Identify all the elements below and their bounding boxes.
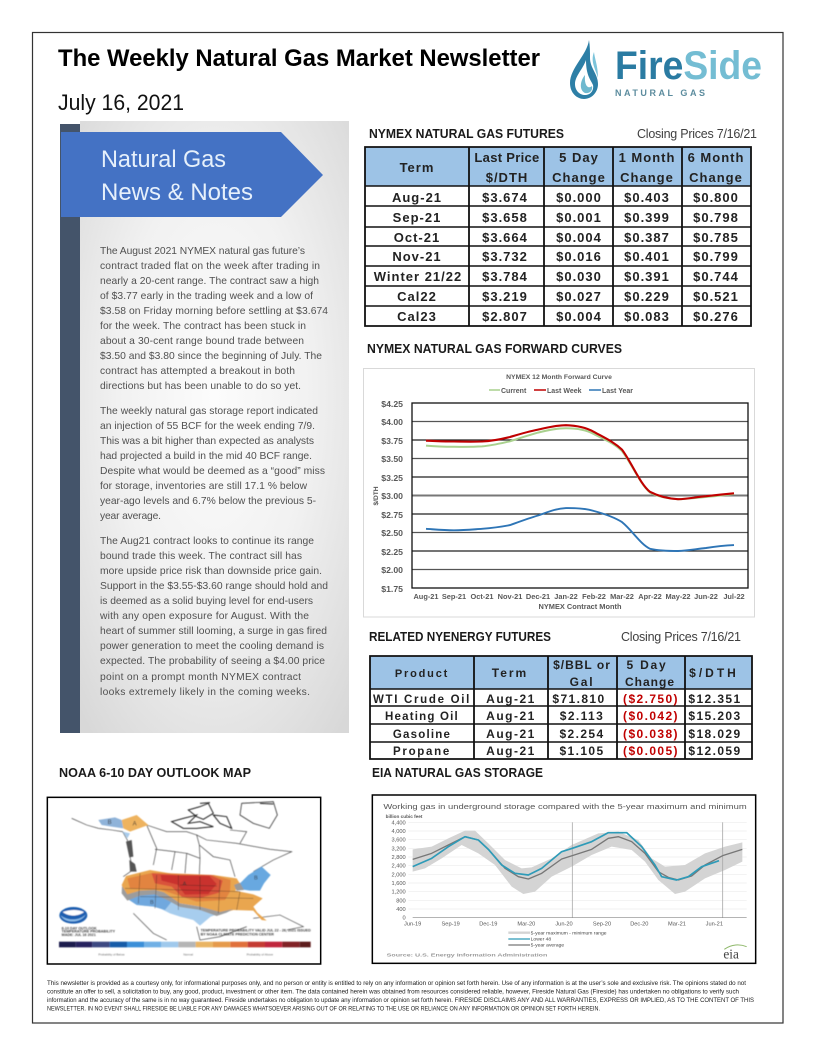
table: NYMEX natural gas futures bbox=[365, 147, 751, 326]
map: Alaska: A bbox=[133, 821, 137, 827]
map: dark red region bbox=[161, 875, 217, 895]
x axis labels: Jan-22 bbox=[554, 592, 578, 601]
y axis labels: $1.75 bbox=[381, 584, 403, 594]
chart title: Working gas in underground storage compared with the 5-year maximum and minimum bbox=[383, 804, 747, 811]
table rows: $0.744 bbox=[693, 269, 739, 284]
text block: market commentary: heart of summer still looming, a surge in gas fired bbox=[100, 626, 327, 637]
text block: market commentary: contract traded flat on the week after trading in bbox=[100, 261, 320, 272]
line: current bbox=[426, 428, 734, 499]
table rows: ($0.005) bbox=[623, 744, 679, 758]
chart legend: 5-year average bbox=[531, 943, 564, 949]
table header: Last Price bbox=[474, 150, 540, 165]
storage range band bbox=[413, 831, 742, 894]
table header: Gal bbox=[570, 675, 594, 689]
text block: market commentary: looks extremely likely in the coming weeks. bbox=[100, 687, 310, 698]
map: strong warm band bbox=[127, 873, 231, 902]
text block: market commentary: bound trade this week. The contract sill has bbox=[100, 551, 302, 562]
table header: $/BBL or bbox=[553, 658, 611, 672]
text block: disclaimer: constitute an offer to sell, a solicitation to buy, any good, product, investment or other item. The data contained herein was obtained from resources considered reliable, however, Fireside Natural Gas (Fireside) has undertaken no obligations to verify such bbox=[47, 988, 740, 996]
table rows: ($0.042) bbox=[623, 709, 679, 723]
map legend labels: Probability of Below bbox=[98, 953, 125, 957]
map: cool northeast region bbox=[235, 867, 271, 891]
table rows: $18.029 bbox=[688, 727, 742, 741]
table rows: $0.276 bbox=[693, 309, 739, 324]
table header: Change bbox=[552, 170, 606, 185]
table header bbox=[400, 150, 744, 185]
map caption text: 6-10 DAY OUTLOOK bbox=[62, 926, 97, 930]
heading: related futures: RELATED NYENERGY FUTURES bbox=[369, 629, 551, 644]
text block: market commentary: $3.58 on Friday morning before settling at $3.674 bbox=[100, 306, 328, 317]
y axis labels: 3,200 bbox=[392, 846, 406, 852]
y axis labels: $3.25 bbox=[381, 473, 403, 483]
y axis labels: $3.75 bbox=[381, 436, 403, 446]
table header bbox=[395, 658, 739, 689]
text block: market commentary: directions but has been unable to do so yet. bbox=[100, 381, 301, 392]
map caption text: BY NOAA CLIMATE PREDICTION CENTER bbox=[201, 932, 274, 936]
table rows: Cal23 bbox=[397, 309, 437, 324]
map caption text: MADE: JUL 16 2021 bbox=[62, 933, 96, 937]
table rows: Winter 21/22 bbox=[374, 269, 462, 284]
table rows: $0.001 bbox=[556, 210, 602, 225]
banner heading: Natural Gas bbox=[101, 146, 226, 173]
map: state lines bbox=[125, 873, 253, 913]
x axis labels: Mar-22 bbox=[610, 592, 634, 601]
table rows: $0.391 bbox=[624, 269, 670, 284]
chart legend: Last Week bbox=[547, 388, 582, 395]
table rows: Sep-21 bbox=[393, 210, 441, 225]
map caption text: TEMPERATURE PROBABILITY bbox=[62, 930, 116, 934]
table rows: Aug-21 bbox=[486, 692, 536, 706]
table rows: $0.401 bbox=[624, 249, 670, 264]
table rows: $12.059 bbox=[688, 744, 742, 758]
table rows: $0.799 bbox=[693, 249, 739, 264]
text block: market commentary: year average. bbox=[100, 511, 161, 522]
title: The Weekly Natural Gas Market Newsletter bbox=[58, 45, 540, 72]
text block: market commentary: $3.50 and $3.80 since the beginning of July. The bbox=[100, 351, 322, 362]
text block: market commentary: The August 2021 NYMEX natural gas future’s bbox=[100, 246, 305, 257]
x axis labels: Oct-21 bbox=[470, 592, 494, 601]
y axis labels: 1,200 bbox=[392, 890, 406, 896]
table header: Change bbox=[625, 675, 675, 689]
y axis labels: 400 bbox=[396, 907, 406, 913]
y axis labels: 1,600 bbox=[392, 881, 406, 887]
text block: market commentary: of $3.77 early in the trading week and a low of bbox=[100, 291, 313, 302]
map legend color bar bbox=[59, 942, 311, 947]
x axis labels: Jun-21 bbox=[706, 921, 723, 927]
map: pacific coast shading bbox=[126, 840, 137, 872]
text block: disclaimer: This newsletter is provided as a courtesy only, for informational purposes only, and no person or entity is entitled to rely on any information or opinion set forth herein. Use of any information is at the user’s sole and exclusive risk. The opinions stated do not bbox=[47, 980, 746, 987]
x axis labels: Dec-19 bbox=[479, 921, 497, 927]
table rows: $3.732 bbox=[482, 249, 528, 264]
text block: market commentary: an injection of 55 BCF for the week ending 7/9. bbox=[100, 421, 315, 432]
text block: market commentary: contract has attempted a breakout in both bbox=[100, 366, 295, 377]
table rows: $2.113 bbox=[560, 709, 604, 723]
table rows: $3.784 bbox=[482, 269, 528, 284]
text block: market commentary: for storage, inventories are still 17.1 % below bbox=[100, 481, 308, 492]
heading: forward curves: NYMEX NATURAL GAS FORWARD CURVES bbox=[367, 341, 622, 356]
text block: disclaimer: information and the accuracy of the same is in no way guaranteed. Fireside undertakes no obligation to update any information or opinion set forth herein. FIRESIDE DISCLAIMS ANY AND ALL WARRANTIES, EXPRESS OR IMPLIED, AS TO THE CONTENT OF THIS bbox=[47, 997, 754, 1004]
panel: news and notes sidebar bbox=[60, 121, 349, 733]
y axis title: $/DTH bbox=[373, 486, 380, 506]
y axis labels: $2.25 bbox=[381, 547, 403, 557]
x axis labels bbox=[413, 592, 745, 601]
map: near normal band bbox=[122, 886, 233, 916]
y axis labels: 3,600 bbox=[392, 838, 406, 844]
x axis labels: Nov-21 bbox=[498, 592, 522, 601]
y axis labels: $2.50 bbox=[381, 528, 403, 538]
table rows: Aug-21 bbox=[392, 190, 442, 205]
table rows: WTI Crude Oil bbox=[373, 694, 471, 706]
map: light cool region bbox=[143, 893, 220, 926]
text block: market commentary: The Aug21 contract looks to continue its range bbox=[100, 536, 314, 547]
table rows: ($2.750) bbox=[623, 692, 679, 706]
y axis labels: 4,000 bbox=[392, 829, 406, 835]
heading: NOAA map: NOAA 6-10 DAY OUTLOOK MAP bbox=[59, 765, 251, 780]
table rows: $0.083 bbox=[624, 309, 670, 324]
table rows: $3.664 bbox=[482, 230, 528, 245]
x axis labels: Dec-20 bbox=[630, 921, 648, 927]
map legend labels bbox=[98, 953, 273, 957]
text block: market commentary: had projected a build in the mid 40 BCF range. bbox=[100, 451, 312, 462]
table rows: Gasoline bbox=[393, 729, 451, 741]
x axis labels: Sep-19 bbox=[442, 921, 460, 927]
table rows: $0.030 bbox=[556, 269, 602, 284]
chart legend: Lower 48 bbox=[531, 937, 551, 943]
table rows: $0.004 bbox=[556, 309, 602, 324]
table rows: $3.658 bbox=[482, 210, 528, 225]
table rows: Aug-21 bbox=[486, 709, 536, 723]
text block: market commentary: This was a bit higher than expected as analysts bbox=[100, 436, 314, 447]
table rows: $0.800 bbox=[693, 190, 739, 205]
table header: $/DTH bbox=[689, 666, 739, 680]
table rows: Aug-21 bbox=[486, 744, 536, 758]
closing prices note: Closing Prices 7/16/21 bbox=[621, 630, 741, 644]
table rows: $0.387 bbox=[624, 230, 670, 245]
text block: market commentary: point on a prompt month NYMEX contract bbox=[100, 672, 301, 683]
table rows: $2.807 bbox=[482, 309, 528, 324]
text block: market commentary: with any open exposure for August. With the bbox=[99, 611, 309, 622]
line: 5-year average bbox=[413, 837, 742, 880]
x axis labels: Mar-20 bbox=[517, 921, 535, 927]
table header: 5 Day bbox=[559, 150, 599, 165]
y axis labels: 2,400 bbox=[392, 864, 406, 870]
table header: Term bbox=[492, 666, 528, 680]
icon: EIA logo: eia bbox=[723, 947, 739, 962]
text block: market commentary: expected. The probability of seeing a $4.00 price bbox=[100, 656, 325, 667]
table rows: $0.016 bbox=[556, 249, 602, 264]
table rows: $3.219 bbox=[482, 289, 528, 304]
x axis labels: Mar-21 bbox=[668, 921, 686, 927]
y axis labels: $3.00 bbox=[381, 491, 403, 501]
y axis labels bbox=[381, 399, 403, 594]
chart: EIA working gas in storage bbox=[372, 795, 756, 963]
x axis labels: Apr-22 bbox=[638, 592, 662, 601]
closing prices note: Closing Prices 7/16/21 bbox=[637, 127, 757, 141]
map: mid cool region bbox=[125, 892, 172, 910]
x axis labels: Sep-21 bbox=[442, 592, 466, 601]
table rows: Nov-21 bbox=[392, 249, 442, 264]
table rows: Cal22 bbox=[397, 289, 437, 304]
source note: Source: U.S. Energy Information Administration bbox=[387, 953, 548, 958]
arrow banner bbox=[61, 132, 323, 217]
text block: market commentary: Despite what would be deemed as a “good” miss bbox=[100, 466, 325, 477]
map legend labels: Probability of Above bbox=[247, 953, 273, 957]
y axis labels: $2.00 bbox=[381, 565, 403, 575]
unit label: billion cubic feet bbox=[386, 814, 423, 819]
table header: Term bbox=[400, 160, 434, 175]
table rows: ($0.038) bbox=[623, 727, 679, 741]
icon: EIA logo bbox=[723, 945, 747, 962]
map: red region bbox=[152, 873, 223, 898]
icon: flame bbox=[570, 40, 598, 99]
x axis labels bbox=[404, 921, 723, 927]
map arctic islands bbox=[172, 803, 273, 828]
table rows: $0.027 bbox=[556, 289, 602, 304]
text block: market commentary: year-ago levels and 6.7% below the previous 5- bbox=[100, 496, 316, 507]
table rows: $3.674 bbox=[482, 190, 528, 205]
chart legend bbox=[489, 388, 633, 395]
sidebar stripe bbox=[60, 124, 80, 733]
table rows: $15.203 bbox=[688, 709, 742, 723]
table header: $/DTH bbox=[486, 170, 528, 185]
x axis labels: Jul-22 bbox=[723, 592, 745, 601]
x axis labels: Jun-20 bbox=[555, 921, 573, 927]
table rows: $0.229 bbox=[624, 289, 670, 304]
period dividers bbox=[572, 822, 723, 918]
x axis labels: May-22 bbox=[665, 592, 691, 601]
table rows: $0.798 bbox=[693, 210, 739, 225]
text block: market commentary: is deemed as a solid buying level for end-users bbox=[100, 596, 313, 607]
map region labels: B bbox=[254, 875, 258, 881]
table header: Change bbox=[689, 170, 743, 185]
chart legend: Last Year bbox=[602, 388, 633, 395]
y axis labels: 4,400 bbox=[392, 820, 406, 826]
x axis bbox=[413, 917, 747, 919]
text block: disclaimer: NEWSLETTER. IN NO EVENT SHALL FIRESIDE BE LIABLE FOR ANY DAMAGES WHATSOEVER ARISING OUT OF OR RELATING TO THE USE OR RELIANCE ON ANY INFORMATION OR OPINION SET FORTH HEREIN. bbox=[47, 1006, 600, 1012]
map: warm probability region bbox=[122, 870, 267, 921]
y axis labels: $3.50 bbox=[381, 454, 403, 464]
line: lower 48 bbox=[413, 833, 719, 880]
table rows: $0.403 bbox=[624, 190, 670, 205]
table rows bbox=[374, 190, 739, 324]
icon: NOAA logo bbox=[59, 907, 87, 924]
table header: Product bbox=[395, 668, 449, 680]
table rows: $0.000 bbox=[556, 190, 602, 205]
y axis labels: $4.25 bbox=[381, 399, 403, 409]
map: NOAA outlook bbox=[47, 797, 321, 964]
chart: NYMEX 12 month forward curve bbox=[364, 368, 754, 617]
text block: market commentary: power generation to meet the cooling demand is bbox=[100, 641, 324, 652]
table rows: $0.004 bbox=[556, 230, 602, 245]
text block: market commentary bbox=[99, 246, 328, 698]
x axis labels: Feb-22 bbox=[582, 592, 606, 601]
table header: 6 Month bbox=[688, 150, 744, 165]
map region labels: A bbox=[183, 881, 187, 887]
table header: 1 Month bbox=[619, 150, 675, 165]
table rows: $0.521 bbox=[693, 289, 739, 304]
chart title: NYMEX 12 Month Forward Curve bbox=[506, 374, 612, 381]
x axis labels: Jun-19 bbox=[404, 921, 421, 927]
chart legend: 5-year maximum - minimum range bbox=[531, 930, 607, 936]
x axis labels: Jun-22 bbox=[694, 592, 718, 601]
chart legend bbox=[508, 930, 607, 949]
y axis labels bbox=[392, 820, 406, 922]
map caption text: TEMPERATURE PROBABILITY VALID JUL 22 - 26, 2021 ISSUED bbox=[201, 929, 311, 933]
table rows: $12.351 bbox=[688, 692, 742, 706]
logo: FireSide Natural Gas bbox=[570, 40, 762, 99]
heading: EIA storage: EIA NATURAL GAS STORAGE bbox=[372, 765, 543, 780]
date: July 16, 2021 bbox=[58, 90, 184, 115]
table rows bbox=[373, 692, 742, 758]
text block: market commentary: The weekly natural gas storage report indicated bbox=[100, 406, 318, 417]
y axis labels: 0 bbox=[403, 916, 406, 922]
table rows: $2.254 bbox=[559, 727, 605, 741]
table header: 5 Day bbox=[626, 658, 668, 672]
table rows: Heating Oil bbox=[385, 711, 459, 723]
logo wordmark: FireSide bbox=[615, 44, 762, 88]
logo tagline: NATURAL GAS bbox=[615, 88, 705, 98]
text block: market commentary: about a 30-cent range bound trade between bbox=[100, 336, 304, 347]
y axis labels: $2.75 bbox=[381, 510, 403, 520]
y axis labels: 800 bbox=[396, 898, 406, 904]
map: Alaska: B bbox=[108, 820, 112, 826]
text block: disclaimer bbox=[47, 980, 754, 1012]
y axis labels: 2,000 bbox=[392, 872, 406, 878]
table rows: Propane bbox=[393, 746, 451, 758]
map caption text bbox=[62, 926, 311, 937]
map legend labels: Normal bbox=[183, 953, 193, 957]
map land outlines bbox=[72, 802, 303, 940]
text block: market commentary: Support in the $3.55-$3.60 range should hold and bbox=[100, 581, 328, 592]
map region labels bbox=[150, 875, 258, 906]
sidebar background bbox=[80, 121, 349, 733]
map region labels: B bbox=[150, 900, 154, 906]
table rows: Aug-21 bbox=[486, 727, 536, 741]
map: Alaska bbox=[98, 815, 148, 838]
x axis labels: Dec-21 bbox=[526, 592, 550, 601]
x axis labels: Aug-21 bbox=[413, 592, 439, 601]
y axis labels: $4.00 bbox=[381, 417, 403, 427]
arrow banner: News & Notes bbox=[101, 179, 253, 206]
table rows: $0.399 bbox=[624, 210, 670, 225]
heading: NYMEX futures: NYMEX NATURAL GAS FUTURES bbox=[369, 126, 564, 141]
table rows: Oct-21 bbox=[394, 230, 440, 245]
table rows: $0.785 bbox=[693, 230, 739, 245]
text block: market commentary: for the week. The contract has been stuck in bbox=[100, 321, 306, 332]
table: related energy futures bbox=[370, 656, 752, 759]
text block: market commentary: more upside price risk than downside price gain. bbox=[100, 566, 322, 577]
table rows: $1.105 bbox=[559, 744, 605, 758]
line: last year bbox=[426, 508, 734, 551]
x axis title: NYMEX Contract Month bbox=[539, 602, 622, 611]
chart legend: Current bbox=[501, 388, 527, 395]
line: last week bbox=[426, 425, 734, 499]
table header: Change bbox=[620, 170, 674, 185]
text block: market commentary: nearly a 20-cent range. The contract saw a high bbox=[100, 276, 319, 287]
table rows: $71.810 bbox=[552, 692, 606, 706]
x axis labels: Sep-20 bbox=[593, 921, 611, 927]
y axis labels: 2,800 bbox=[392, 855, 406, 861]
